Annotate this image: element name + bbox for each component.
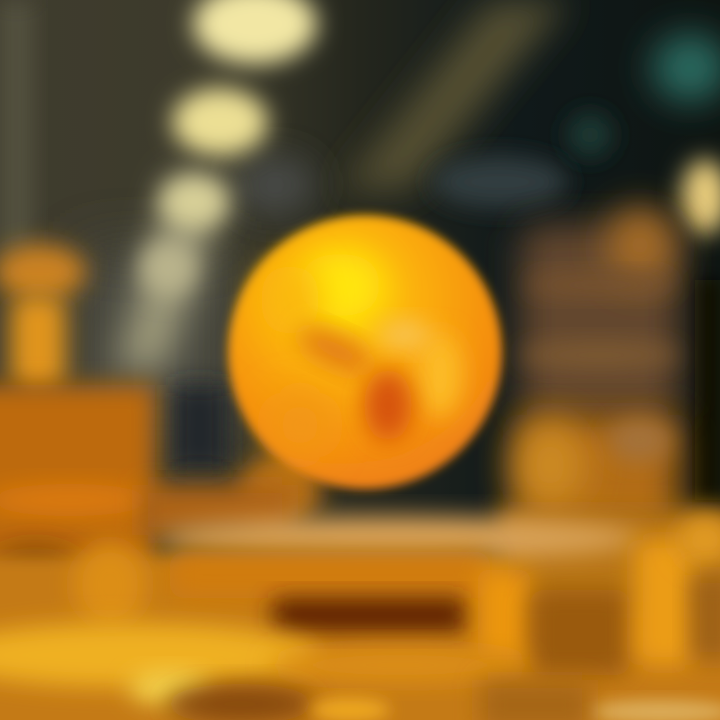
golden orb (228, 215, 502, 489)
gold chess-like figure: left (0, 244, 155, 625)
base below orb (140, 454, 322, 535)
gold stack: right, brown column (515, 207, 680, 535)
ceiling lights (115, 0, 720, 370)
gold floor (0, 510, 720, 720)
